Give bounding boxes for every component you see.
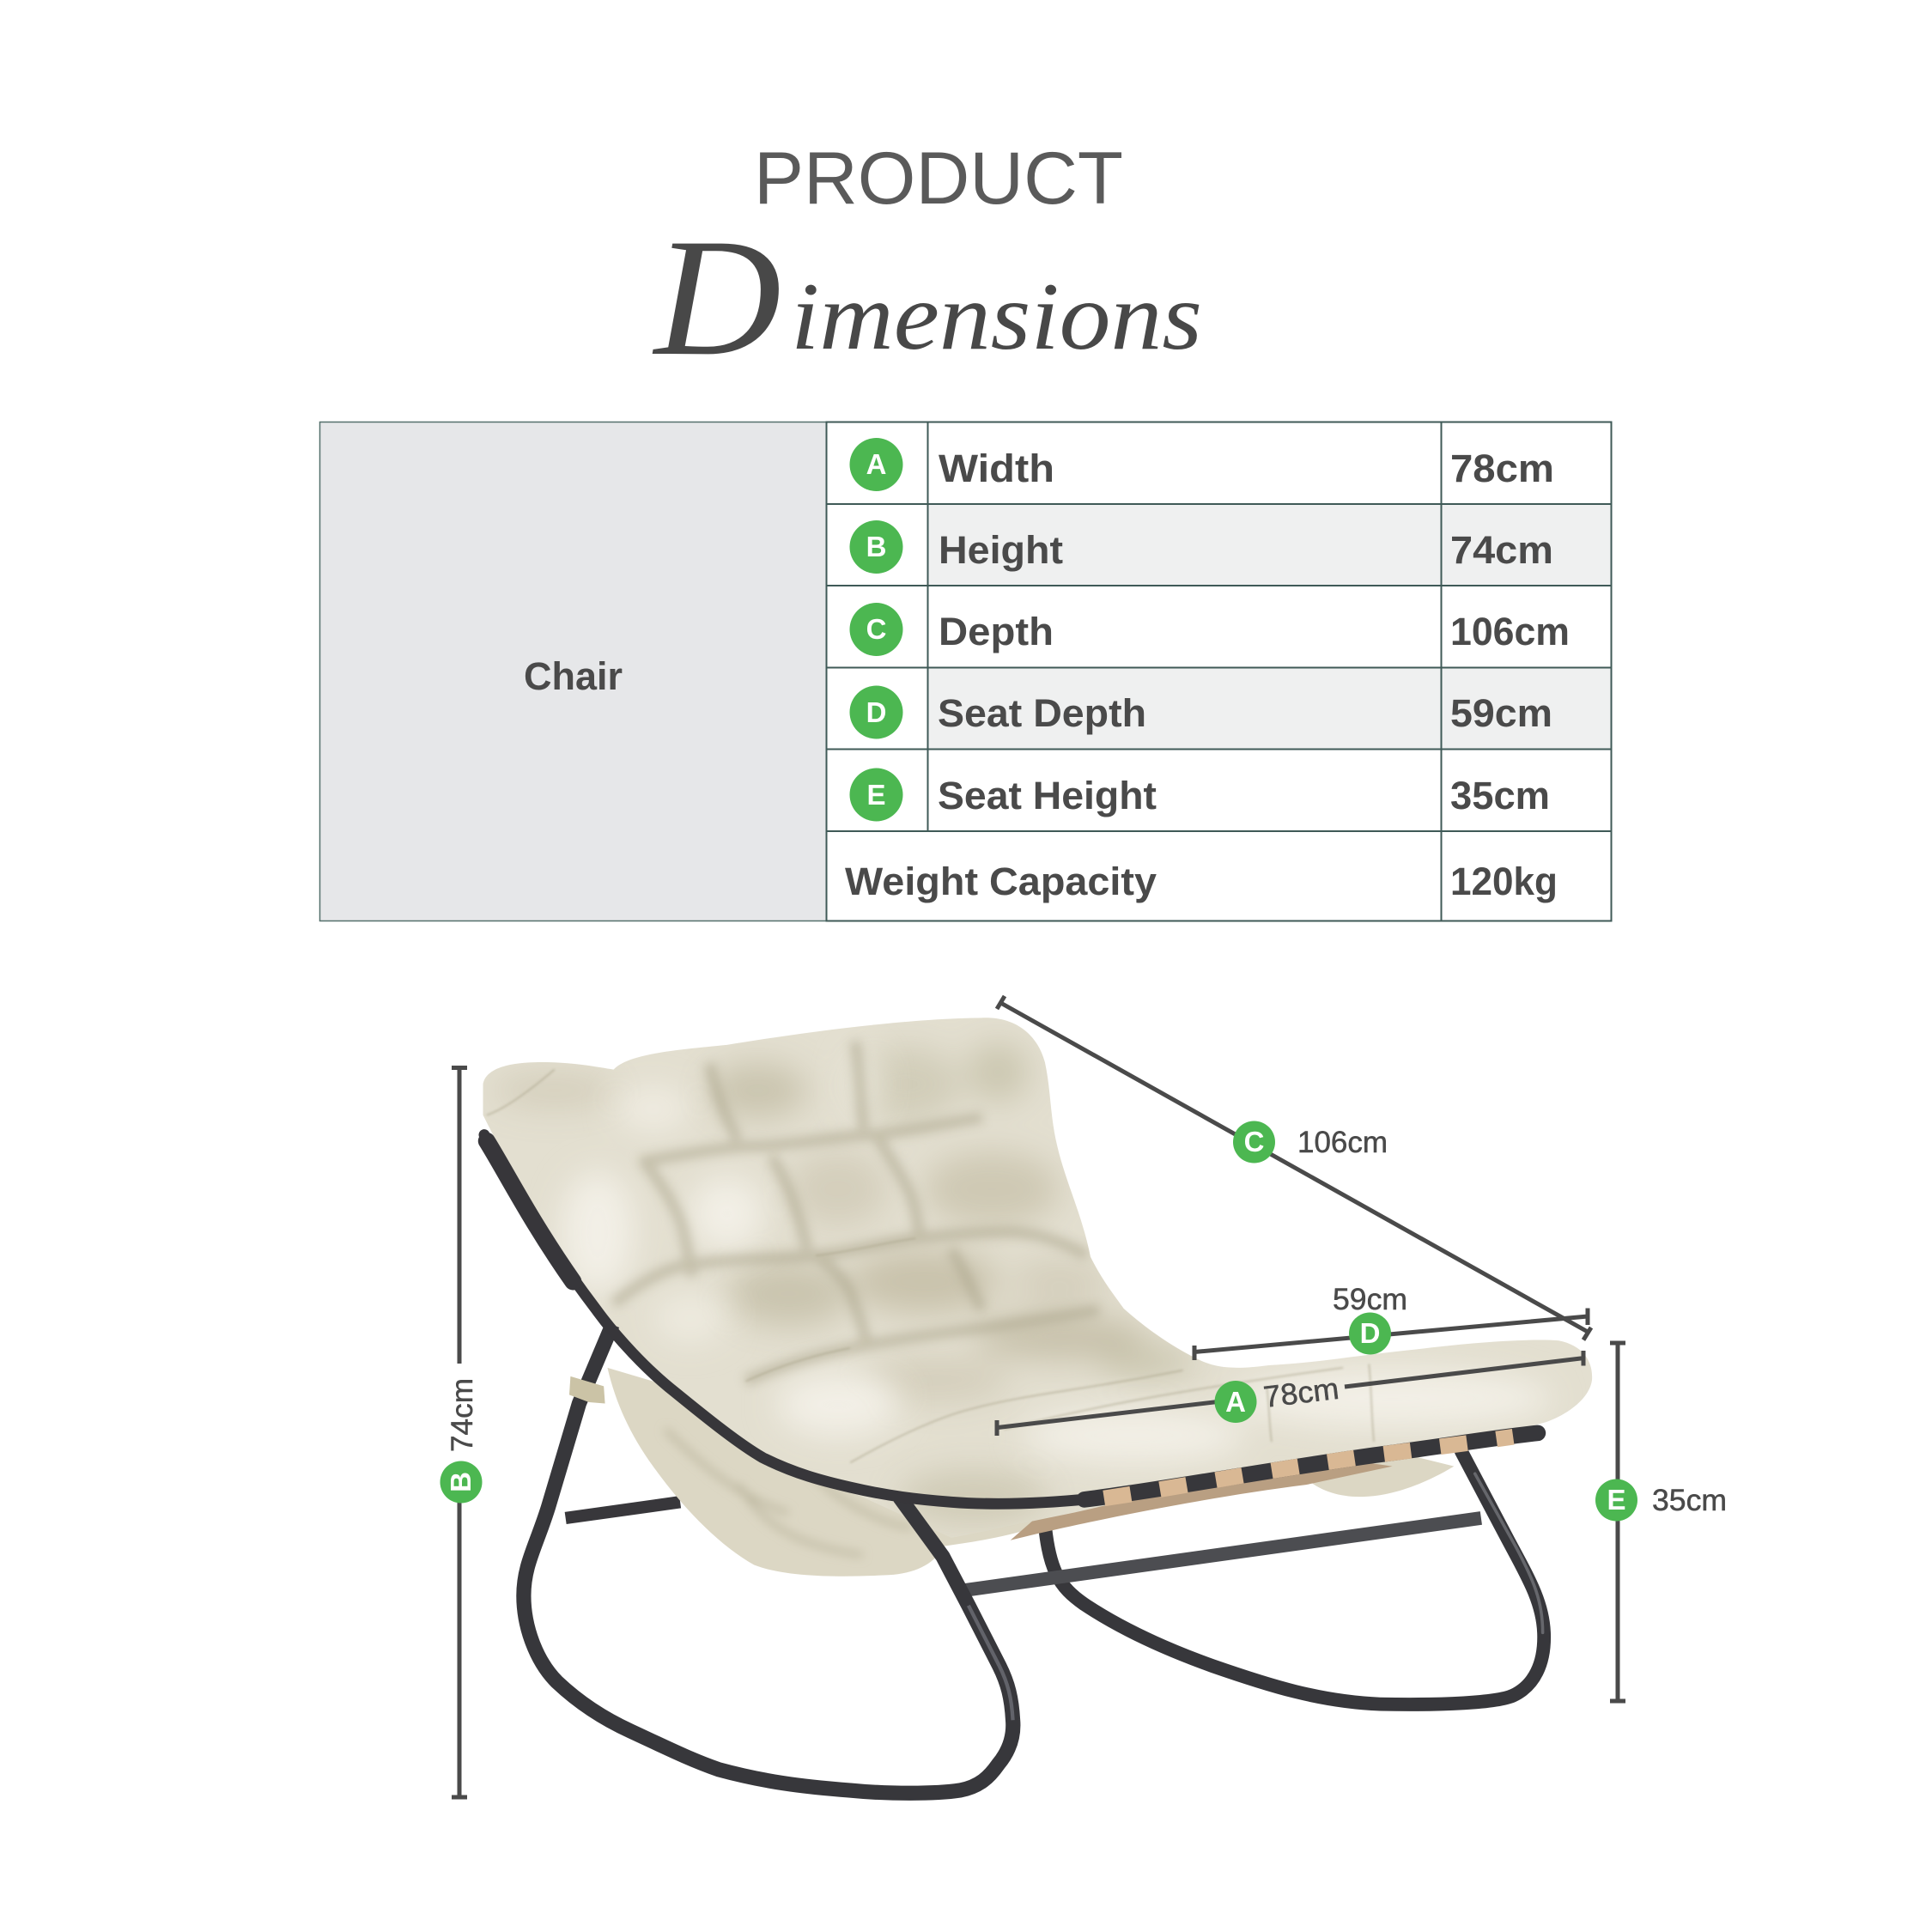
tuft seams: fine lines: [487, 1070, 1374, 1462]
near rocker and legs: [524, 1325, 1013, 1793]
rear cross bar: [566, 1502, 680, 1518]
dimension B: height: [440, 1068, 483, 1797]
row: Weight Capacity: Weight Capacity: [845, 860, 1157, 903]
rocking chair illustration: [483, 1018, 1592, 1793]
row: C Depth: Depth: [939, 610, 1054, 653]
row: D Seat Depth: [850, 685, 1552, 738]
row: Weight Capacity: 120kg: [1450, 860, 1558, 903]
dimension C: depth: C: [1244, 1126, 1264, 1157]
row: A Width: 78cm: [1450, 447, 1554, 490]
cross bar: [961, 1518, 1481, 1591]
seat rail with woven straps: [1084, 1433, 1538, 1499]
row: C Depth: 106cm: [1450, 610, 1570, 653]
row: C Depth: [850, 603, 1570, 656]
dimension A: width: A: [1225, 1386, 1246, 1418]
specification table: [319, 422, 1611, 920]
row: E Seat Height: [850, 768, 1550, 821]
cell: Chair: [319, 422, 826, 920]
row: B Height: B: [866, 531, 886, 562]
row: D Seat Depth: D: [866, 696, 886, 728]
cushion highlights: [561, 1050, 1552, 1462]
row: A Width: A: [866, 448, 886, 480]
dimension E: seat height: E: [1607, 1484, 1626, 1516]
row: B Height: Height: [939, 528, 1063, 572]
cushion: [483, 1018, 1592, 1538]
row: C Depth: C: [866, 613, 886, 645]
side bracket: [569, 1376, 605, 1403]
far rocker: [1043, 1451, 1544, 1704]
row: E Seat Height: E: [866, 779, 886, 811]
row: D Seat Depth: 59cm: [1450, 691, 1552, 735]
dimension E: seat height: [1595, 1343, 1727, 1701]
row: Weight Capacity: [845, 860, 1558, 903]
dimension E: seat height: 35cm: [1652, 1484, 1727, 1517]
cell: Chair: Chair: [524, 654, 623, 698]
title: Dimensions script: [652, 204, 1202, 391]
dimension A: width: [997, 1351, 1583, 1436]
dimension B: height: B: [445, 1472, 477, 1492]
row: A Width: [850, 438, 1554, 491]
cushion shading: [493, 1042, 1195, 1524]
row: B Height: 74cm: [1450, 528, 1553, 572]
cushion underside: [607, 1368, 1454, 1577]
dimension C: depth: 106cm: [1297, 1126, 1388, 1159]
title: Dimensions script: imensions: [791, 264, 1202, 370]
row: E Seat Height: Seat Height: [938, 774, 1157, 817]
row: D Seat Depth: Seat Depth: [938, 691, 1146, 735]
title: PRODUCT: PRODUCT: [754, 137, 1123, 220]
armrest tube: [484, 1135, 1096, 1504]
row: B Height: [850, 520, 1553, 574]
dimension D: seat depth: D: [1360, 1317, 1380, 1349]
row: A Width: Width: [939, 447, 1054, 490]
table grid: [826, 422, 1611, 920]
title: Dimensions script: D: [652, 204, 781, 391]
dimension C: depth: [997, 996, 1591, 1340]
tuft seams: soft shadow: [614, 1042, 1099, 1382]
row: E Seat Height: 35cm: [1450, 774, 1550, 817]
dimension A: width: 78cm: [1261, 1372, 1340, 1414]
seat webbing shadow: [1011, 1454, 1393, 1540]
dimension D: seat depth: 59cm: [1333, 1283, 1407, 1316]
dimension D: seat depth: [1194, 1283, 1588, 1360]
dimension B: height: 74cm: [446, 1378, 479, 1452]
